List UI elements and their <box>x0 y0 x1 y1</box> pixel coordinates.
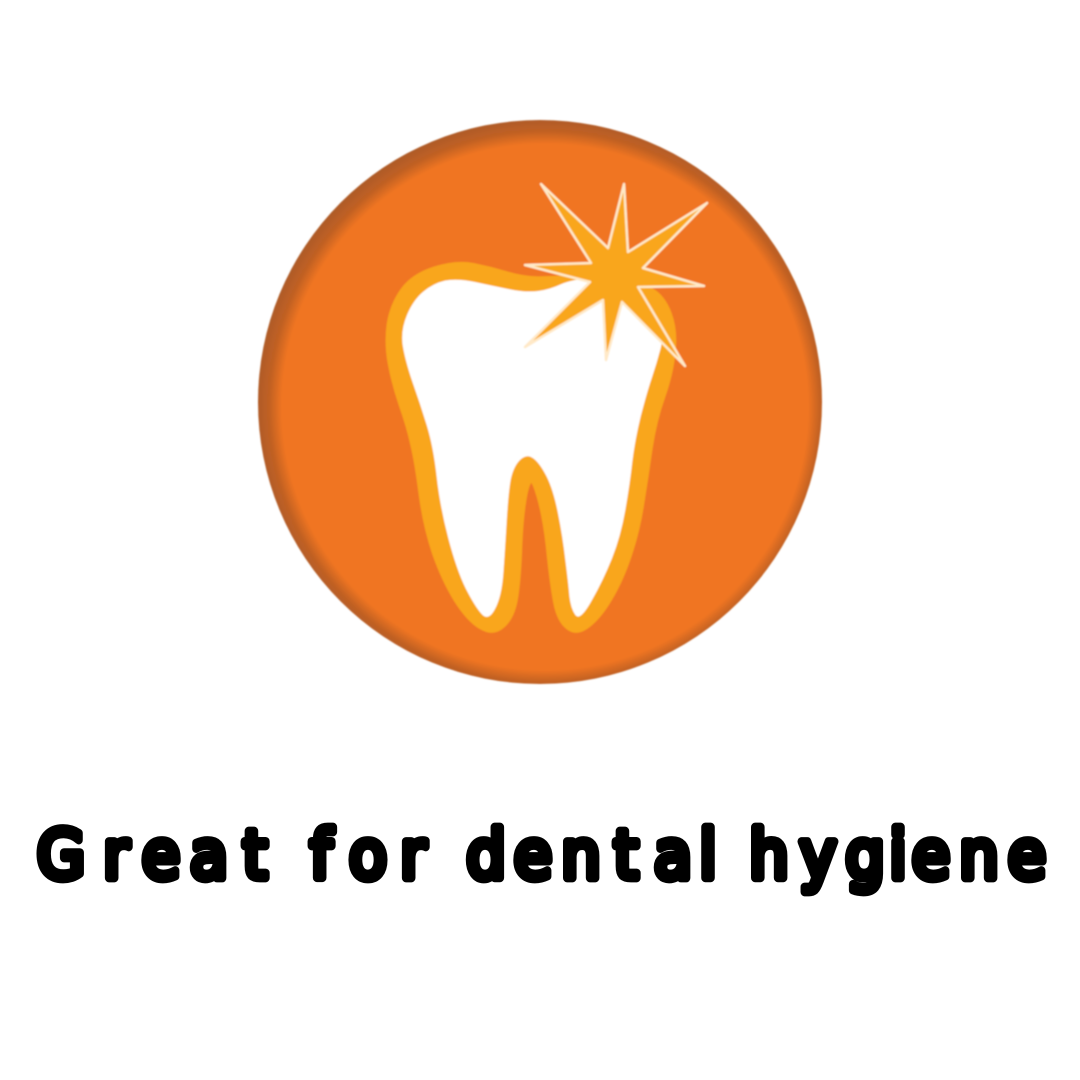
tooth outline <box>388 264 674 631</box>
orange disc <box>258 120 822 684</box>
tooth white fill <box>402 278 662 617</box>
tooth <box>388 264 674 631</box>
icon: orange disc with tooth <box>258 120 822 684</box>
title: Great for dental hygiene <box>37 817 1046 895</box>
sparkle star <box>525 184 707 366</box>
